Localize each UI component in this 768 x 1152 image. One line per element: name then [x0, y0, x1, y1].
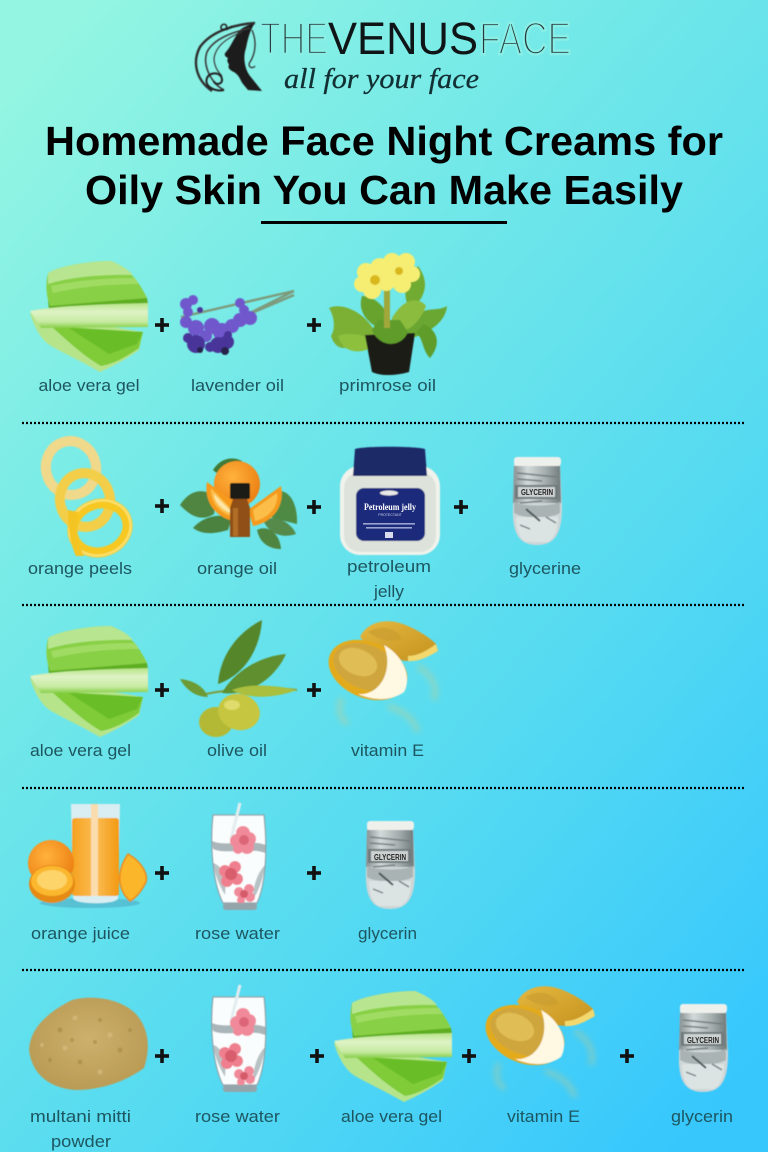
icon: olive branch [180, 620, 297, 737]
title [45, 118, 723, 224]
icon: petroleum jelly jar [340, 447, 440, 555]
plus [307, 500, 321, 514]
label: orange oil: orange oil [197, 559, 277, 578]
label: orange juice: orange juice [31, 924, 130, 943]
plus [155, 683, 169, 697]
plus [462, 1049, 476, 1063]
logo tagline: all for your face [284, 63, 479, 95]
label: multani mitti powder: multani mitti [30, 1107, 131, 1126]
icon: glycerin jar [513, 457, 562, 545]
label: glycerine: glycerine [509, 559, 581, 578]
label: multani mitti powder: powder [51, 1132, 111, 1151]
icon: glycerin jar: GLYCERIN [687, 1036, 719, 1045]
label: aloe vera gel: aloe vera gel [341, 1107, 442, 1126]
icon: vitamin E capsules [476, 986, 595, 1097]
icon: rose water glass [212, 803, 266, 910]
label: petroleum jelly: jelly [373, 582, 404, 601]
icon: orange juice [28, 804, 146, 908]
plus [155, 318, 169, 332]
logo: The Venus Face [196, 13, 571, 95]
label: glycerin: glycerin [671, 1107, 733, 1126]
plus [454, 500, 468, 514]
icon: lavender [180, 291, 294, 355]
plus [307, 683, 321, 697]
logo wordmark: THE [260, 13, 328, 64]
logo icon: face silhouette with curls [196, 23, 262, 91]
plus [155, 866, 169, 880]
icon: orange oil [180, 458, 297, 549]
label: multani mitti powder [30, 1107, 131, 1151]
recipe 1 [30, 253, 447, 395]
icon: rose water glass [212, 985, 266, 1092]
icon: petroleum jelly jar: PROTECTANT [378, 513, 403, 517]
icon: multani mitti powder [29, 998, 148, 1090]
label: aloe vera gel: aloe vera gel [30, 741, 131, 760]
label: orange peels: orange peels [28, 559, 132, 578]
icon: glycerin jar [366, 821, 415, 909]
icon: aloe vera [30, 261, 148, 372]
icon: primrose [329, 253, 447, 375]
recipe 3 [30, 620, 438, 760]
label: petroleum jelly [347, 557, 431, 601]
label: lavender oil: lavender oil [191, 376, 284, 395]
title: Oily Skin You Can Make Easily [85, 167, 683, 213]
label: aloe vera gel: aloe vera gel [38, 376, 140, 395]
icon: glycerin jar [679, 1004, 728, 1092]
icon: aloe vera [334, 991, 452, 1102]
label: primrose oil: primrose oil [339, 376, 436, 395]
recipe 2 [28, 435, 581, 601]
label: vitamin E: vitamin E [351, 741, 424, 760]
plus [310, 1049, 324, 1063]
label: vitamin E: vitamin E [507, 1107, 580, 1126]
plus [155, 1049, 169, 1063]
label: olive oil: olive oil [207, 741, 267, 760]
title: Homemade Face Night Creams for [45, 118, 723, 164]
plus [307, 318, 321, 332]
plus [307, 866, 321, 880]
label: petroleum jelly: petroleum [347, 557, 431, 576]
plus [155, 499, 169, 513]
label: rose water: rose water [195, 1107, 280, 1126]
plus [620, 1049, 634, 1063]
icon: petroleum jelly jar: Petroleum jelly [364, 502, 416, 512]
recipe 5 [29, 985, 733, 1151]
icon: vitamin E capsules [319, 621, 438, 732]
label: rose water: rose water [195, 924, 280, 943]
label: glycerin: glycerin [358, 924, 417, 943]
icon: glycerin jar: GLYCERIN [521, 488, 553, 497]
logo wordmark: FACE [479, 13, 571, 64]
icon: orange peels [40, 435, 138, 564]
icon: glycerin jar: GLYCERIN [374, 853, 406, 862]
logo wordmark: VENUS [328, 13, 478, 64]
recipe 4 [28, 803, 417, 943]
logo wordmark [260, 13, 571, 64]
icon: aloe vera [30, 626, 148, 737]
